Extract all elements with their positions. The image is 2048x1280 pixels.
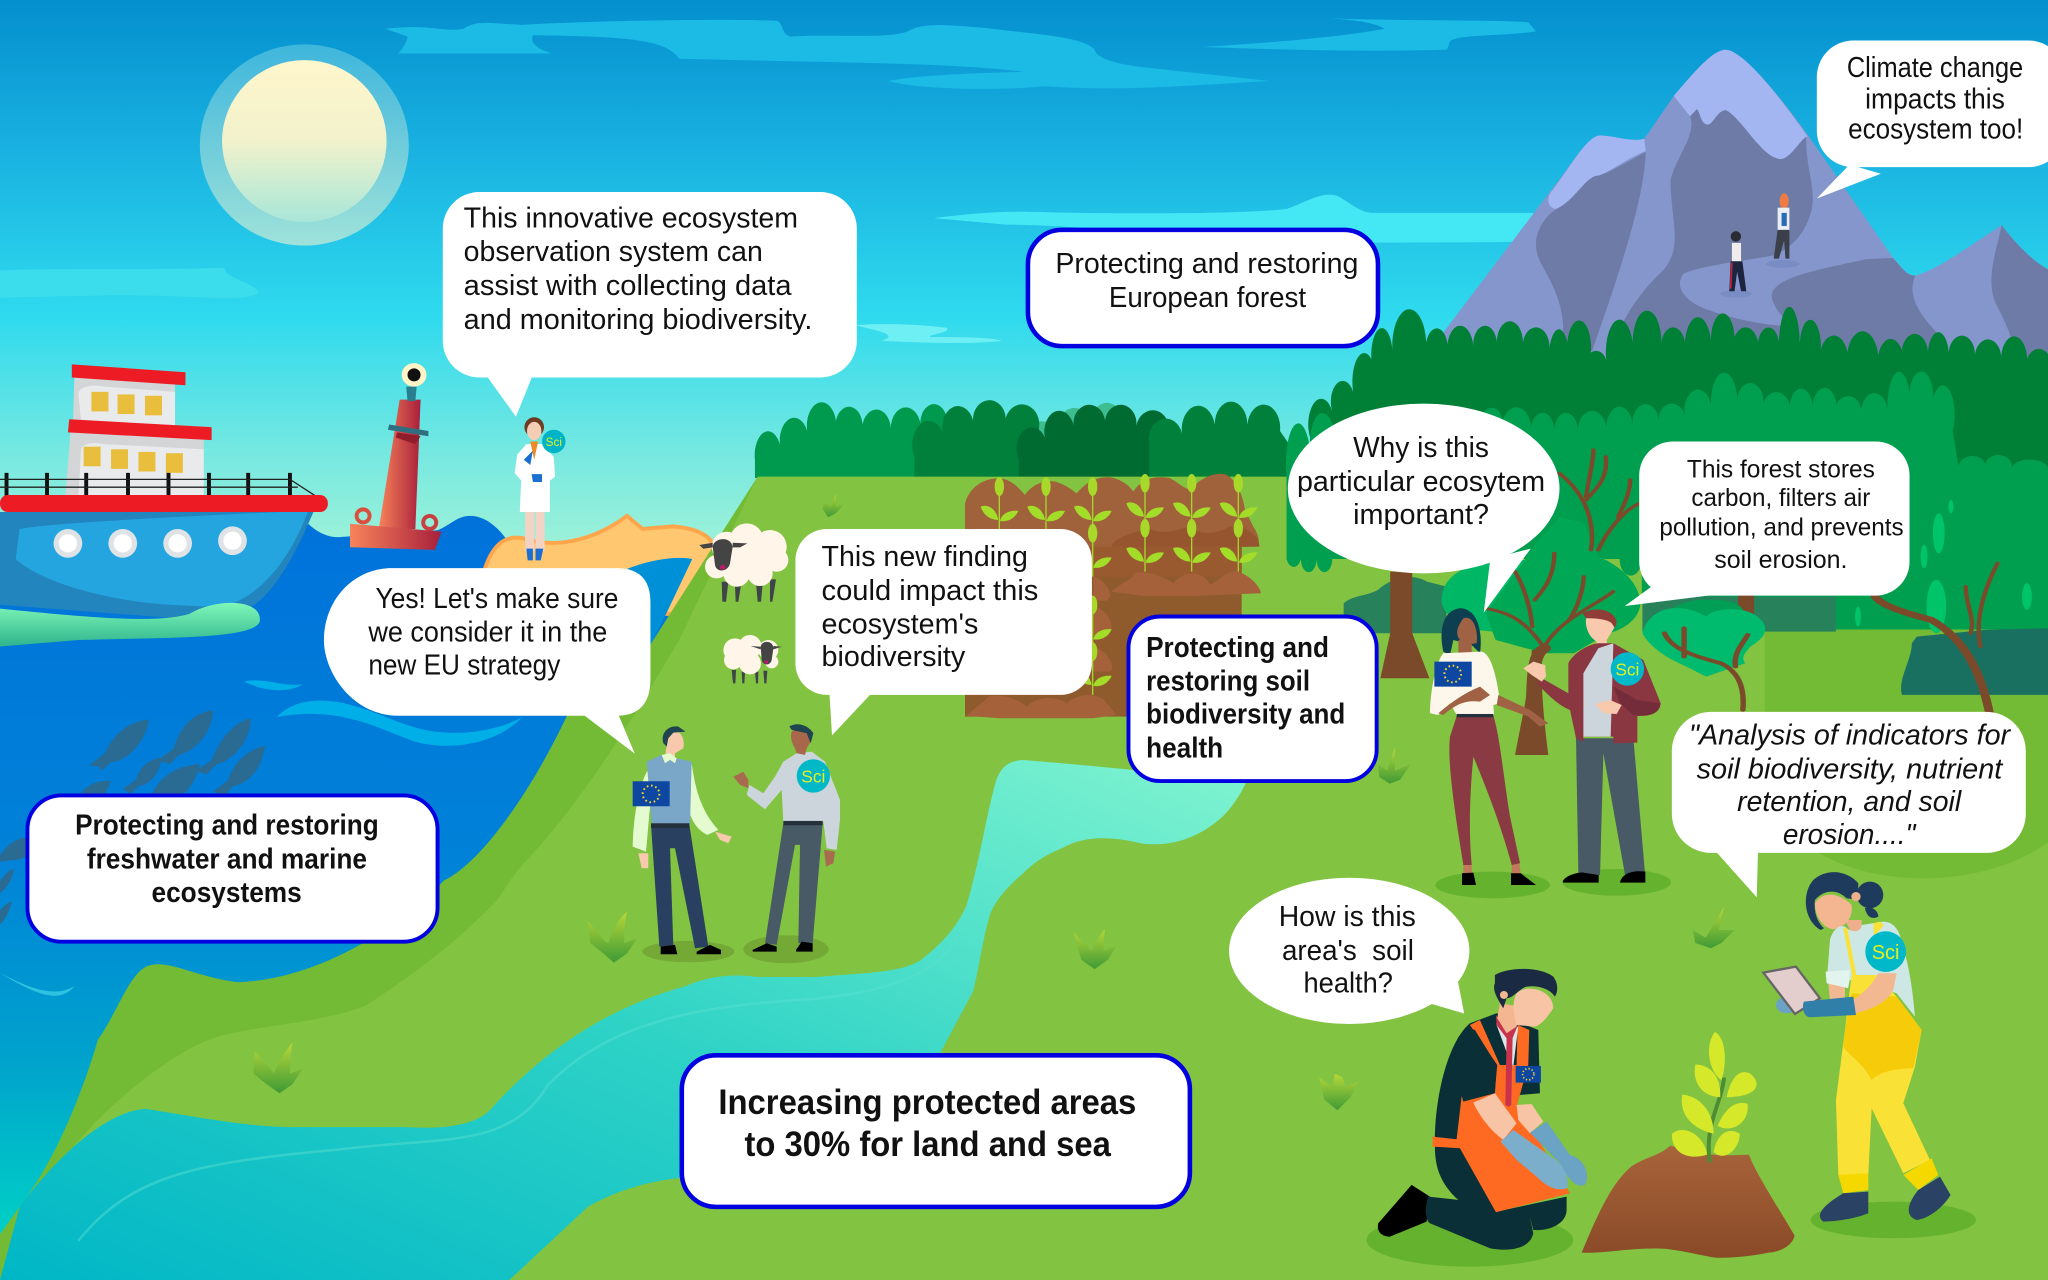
buoy <box>350 363 441 550</box>
land: darker coastal band <box>0 477 2048 1280</box>
box: freshwater and marine ecosystems: freshwater and marine <box>87 844 367 876</box>
Sci badge <box>1865 931 1906 972</box>
speech bubble: forest stores carbon: pollution, and prevents <box>1659 515 1904 542</box>
speech bubble: analysis of indicators: erosion...." <box>1783 819 1917 851</box>
box: freshwater and marine ecosystems: ecosystems <box>152 877 302 909</box>
river <box>0 760 1246 1280</box>
speech bubble: analysis of indicators <box>1672 712 2026 897</box>
speech bubble: EU strategy: we consider it in the <box>367 616 607 648</box>
Sci badge <box>542 430 566 453</box>
box: European forest <box>1028 230 1378 346</box>
speech bubble: forest stores carbon: soil erosion. <box>1714 547 1848 574</box>
ship <box>0 364 328 647</box>
sheep large <box>699 523 788 602</box>
speech bubble: soil health: health? <box>1304 968 1393 1000</box>
EU badge <box>1516 1066 1541 1083</box>
Sci badge: Sci <box>1872 942 1900 964</box>
box: soil biodiversity and health: Protecting and <box>1146 632 1329 664</box>
speech bubble: analysis of indicators: "Analysis of indicators for <box>1689 719 2012 751</box>
sheep small <box>723 635 782 683</box>
grass tufts <box>253 494 1735 1110</box>
speech bubble: analysis of indicators: retention, and soil <box>1737 786 1963 818</box>
speech bubble: new finding: biodiversity <box>822 641 966 673</box>
EU flag <box>633 781 670 806</box>
speech bubble: observation system <box>443 192 857 417</box>
speech bubble: climate change: impacts this <box>1865 83 2005 115</box>
box: increasing protected areas: Increasing protected areas <box>718 1083 1136 1122</box>
Sci badge <box>1611 652 1644 686</box>
scientist man <box>733 724 840 963</box>
speech bubble: forest stores carbon: carbon, filters air <box>1691 485 1870 512</box>
box: soil biodiversity and health: biodiversity and <box>1146 699 1345 731</box>
horizon bushes <box>755 400 1313 478</box>
speech bubble: observation system: and monitoring biodiversity. <box>464 304 812 336</box>
sea waves <box>0 680 522 996</box>
speech bubble: climate change: Climate change <box>1847 52 2023 84</box>
speech bubble: analysis of indicators: soil biodiversity, nutrient <box>1697 753 2003 785</box>
speech bubble: why important <box>1288 404 1560 613</box>
scientist in maroon jacket <box>1523 609 1671 896</box>
clouds <box>0 18 1536 343</box>
EU flag <box>1434 662 1472 687</box>
speech bubble: EU strategy: Yes! Let's make sure <box>376 583 618 615</box>
mountain <box>1435 50 2048 367</box>
woman with EU flag <box>1430 608 1550 898</box>
speech bubble: climate change <box>1817 40 2048 199</box>
box: increasing protected areas <box>682 1055 1190 1207</box>
soil mound with seedling <box>1582 1032 1795 1258</box>
darker meadow patch <box>1765 630 2048 878</box>
box: soil biodiversity and health <box>1128 616 1377 781</box>
school of fish <box>0 711 265 925</box>
box: freshwater and marine ecosystems <box>27 795 438 942</box>
front forest <box>1286 371 2048 630</box>
Sci badge: Sci <box>801 767 825 787</box>
woman with clipboard <box>1763 872 1976 1238</box>
speech bubble: why important: important? <box>1353 499 1489 531</box>
speech bubble: climate change: ecosystem too! <box>1848 113 2023 145</box>
box: European forest: Protecting and restoring <box>1055 248 1358 280</box>
speech bubble: why important: Why is this <box>1353 432 1489 464</box>
speech bubble: EU strategy: new EU strategy <box>368 650 561 682</box>
speech bubble: new finding: could impact this <box>822 575 1038 607</box>
kneeling worker <box>1367 969 1587 1267</box>
box: soil biodiversity and health: restoring soil <box>1146 665 1310 697</box>
hikers <box>1720 193 1800 298</box>
box: freshwater and marine ecosystems: Protecting and restoring <box>75 810 379 842</box>
speech bubble: EU strategy <box>324 568 650 754</box>
Sci badge: Sci <box>546 436 562 449</box>
sun <box>200 44 409 246</box>
speech bubble: observation system: This innovative ecosystem <box>464 202 798 234</box>
speech bubble: why important: particular ecosytem <box>1297 466 1545 498</box>
box: European forest: European forest <box>1109 282 1306 314</box>
speech bubble: soil health: How is this <box>1279 901 1416 933</box>
speech bubble: soil health: area's soil <box>1282 935 1414 967</box>
speech bubble: new finding: ecosystem's <box>822 608 978 640</box>
back forest behind the mountain foot <box>1308 307 2048 562</box>
lagoon <box>614 558 692 653</box>
speech bubble: observation system: assist with collecting data <box>464 270 792 302</box>
sea <box>0 516 731 1280</box>
scientist in lab coat <box>515 417 566 560</box>
land: main meadow <box>20 477 2048 1280</box>
speech bubble: new finding <box>795 529 1092 735</box>
Sci badge: Sci <box>1615 660 1639 680</box>
speech bubble: forest stores carbon <box>1625 441 1910 606</box>
soil field with sprouts <box>965 474 1261 718</box>
Sci badge <box>797 759 830 793</box>
speech bubble: new finding: This new finding <box>822 541 1028 573</box>
sky background <box>0 0 2048 575</box>
box: increasing protected areas: to 30% for land and sea <box>744 1125 1111 1164</box>
box: soil biodiversity and health: health <box>1146 733 1223 765</box>
foreground trees and bushes <box>1344 450 2048 720</box>
speech bubble: soil health <box>1229 878 1469 1024</box>
speech bubble: observation system: observation system can <box>464 236 763 268</box>
speech bubble: forest stores carbon: This forest stores <box>1687 456 1875 483</box>
EU official with flag <box>633 726 734 962</box>
sand beach <box>485 516 714 614</box>
